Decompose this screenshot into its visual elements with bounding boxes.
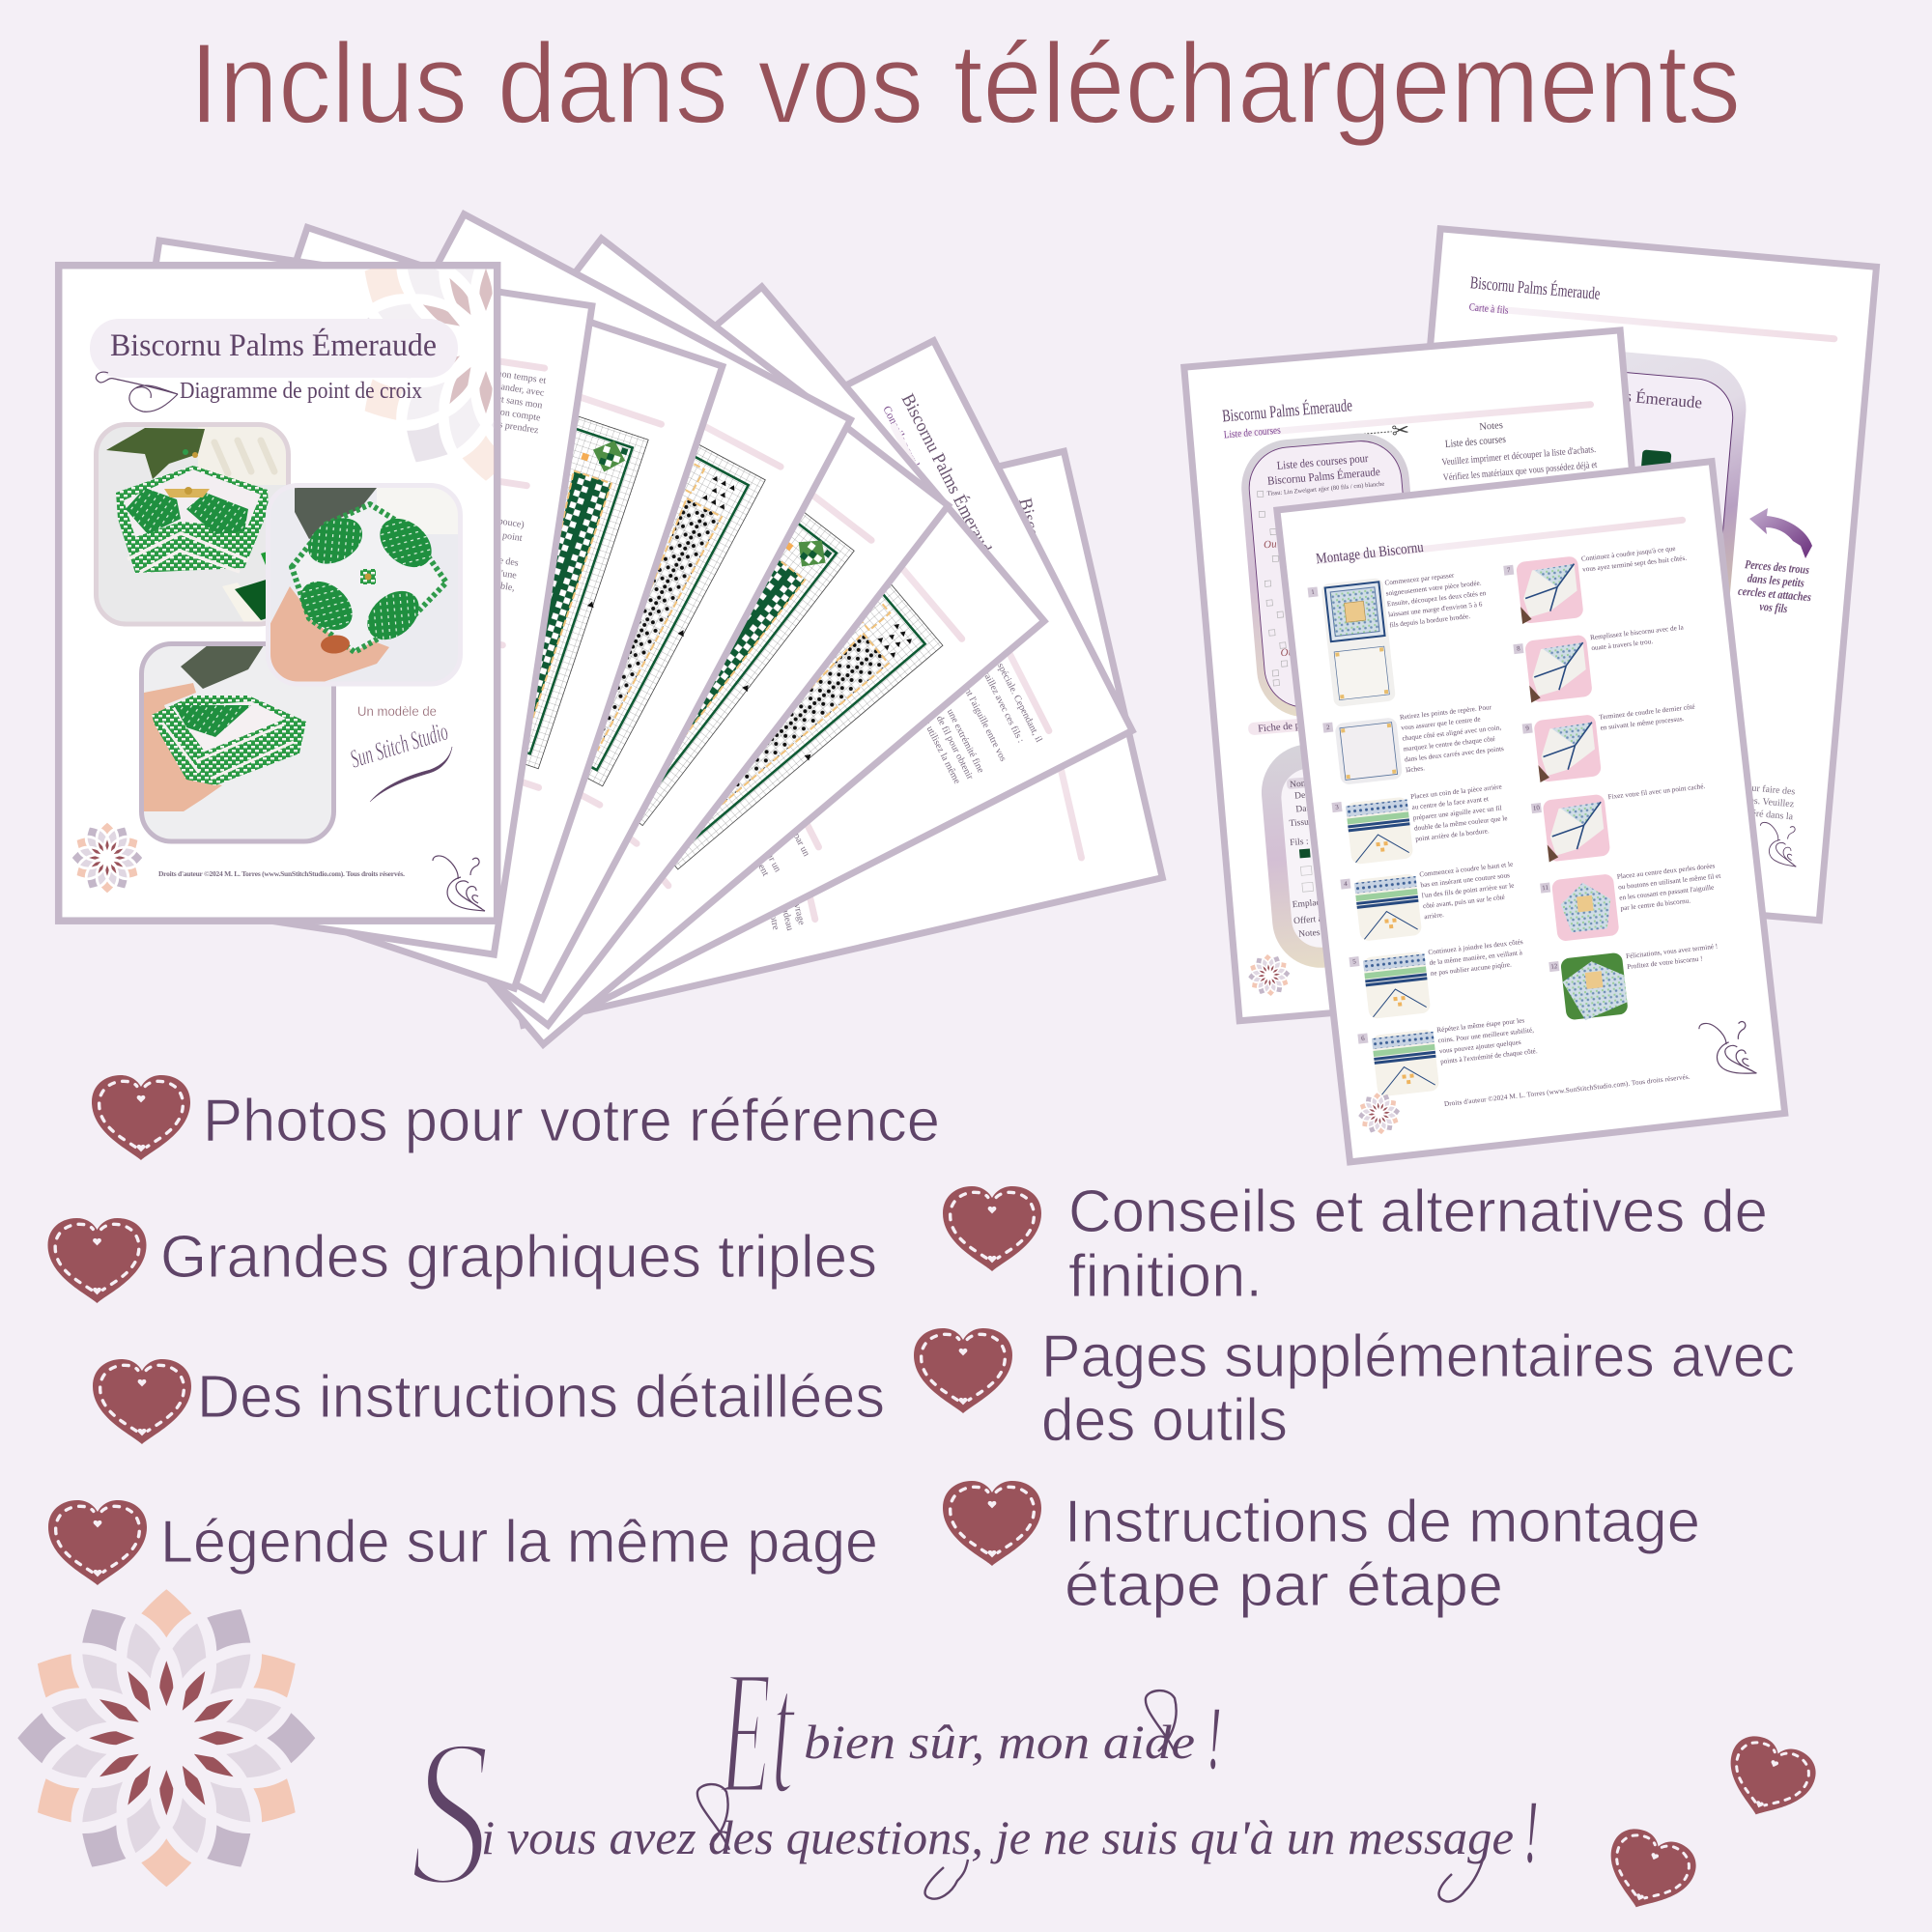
notes column: Veuillez imprimer et découper la liste d'achats.: [1441, 444, 1596, 468]
page: thread tips: créez, une extrémité fine: [933, 685, 986, 776]
icon: heart, upper right: [1716, 1729, 1822, 1830]
feature text: Conseils et alternatives de: [1068, 1179, 1768, 1245]
callout: pierce holes note: cercles et attaches: [1738, 584, 1812, 604]
feature text: Des instructions détaillées: [197, 1364, 885, 1431]
cross stitch sheet card: Designer: [1294, 789, 1329, 802]
step 2: vous assurer que le centre de: [1401, 715, 1481, 732]
step 4: l'un des fils de point arrière sur le: [1421, 882, 1515, 899]
step 3: [1331, 782, 1511, 867]
watermark mandala: [365, 269, 495, 481]
footer copyright: Droits d'auteur ©2024 M. L. Torres (www.SunStitchStudio.com). Tous droits réservés.: [1444, 1073, 1690, 1108]
step 5: ne pas oublier aucune piqûre.: [1430, 960, 1512, 978]
step 9: [1521, 703, 1701, 783]
step 10: 10: [1533, 804, 1541, 812]
page: chart 2: [156, 214, 850, 999]
step 6: points à l'extrémité de chaque côté.: [1440, 1047, 1538, 1065]
step 9: 9: [1525, 724, 1530, 732]
script message line 1: Et: [720, 1634, 796, 1832]
callout: pierce holes note: Perces des trous: [1745, 557, 1810, 577]
step 12: Profitez de votre biscornu !: [1627, 954, 1703, 971]
step 12: [1548, 942, 1724, 1024]
step 3: double de la même couleur que le: [1414, 814, 1508, 833]
step 3: préparez une aiguille avec un fil: [1412, 805, 1502, 822]
step 1: fils depuis la bordure brodée.: [1389, 612, 1471, 629]
step 9: Terminez de coudre le dernier côté: [1599, 703, 1695, 722]
panel: cover page: [55, 262, 500, 924]
page: introduction text: d'une: [496, 568, 518, 582]
step 4: 4: [1344, 880, 1349, 888]
subheading: Carte à fils: [1468, 301, 1509, 317]
step 8: ouate à travers le trou.: [1591, 638, 1654, 652]
feature text: finition.: [1068, 1243, 1263, 1310]
cross stitch sheet card: Offert à: [1293, 914, 1323, 926]
step 3: Placez un coin de la pièce arrière: [1410, 782, 1502, 801]
step 6: Répétez la même étape pour les: [1436, 1016, 1525, 1034]
step 8: Remplissez le biscornu avec de la: [1590, 623, 1685, 641]
page: introduction text: contact sans mon: [475, 390, 543, 412]
step 1: [1307, 566, 1497, 709]
shopping list card: Tissu: Lin Zweigart ajjer (80 fils / cm) blanche: [1266, 481, 1385, 497]
page: thread tips: brin de fil pour obtenir: [925, 698, 976, 781]
title: Inclus dans vos téléchargements: [189, 20, 1741, 148]
step 8: [1513, 623, 1690, 704]
feature text: étape par étape: [1065, 1552, 1503, 1619]
step 4: Commencez à coudre le haut et le: [1419, 861, 1514, 878]
step 10: Fixez votre fil avec un point caché.: [1607, 782, 1706, 801]
icon: heart: [48, 1218, 147, 1303]
page: introduction text: (pouce): [495, 516, 525, 530]
notes column: cochez les cases correspondantes.: [1444, 475, 1599, 498]
cover title pill: [90, 319, 458, 378]
cross stitch sheet card: Date: [1295, 804, 1314, 815]
photo: biscornu top view, left: [94, 422, 291, 626]
cross stitch sheet card: Emplacement: [1292, 896, 1344, 910]
step 1: laissant une marge d'environ 5 à 6: [1388, 600, 1483, 618]
shopping list card: Ou: [1264, 538, 1278, 551]
page: rotated text page, far right: Biscornu Palms Émeraude: [1014, 497, 1076, 680]
corner swirl: [1757, 822, 1800, 867]
page: chart 4: [261, 287, 1044, 1044]
icon: heart: [943, 1481, 1041, 1566]
step 11: [1540, 862, 1726, 943]
step 9: en suivant le même processus.: [1600, 715, 1685, 732]
step 11: 11: [1542, 884, 1549, 892]
heading: Biscornu Palms Émeraude: [1469, 271, 1601, 303]
feature text: des outils: [1041, 1387, 1288, 1454]
step 4: [1340, 861, 1520, 943]
panel: thread card page, back: espéré dans la: [1739, 808, 1794, 822]
step 6: coins. Pour une meilleure stabilité,: [1437, 1026, 1534, 1044]
step 1: Commencez par repasser: [1384, 572, 1455, 587]
corner swirl: [433, 856, 485, 911]
arrow: pointing to card: [1749, 508, 1812, 558]
callout: pierce holes note: vos fils: [1759, 600, 1788, 615]
photo: biscornu in hand, bottom: [139, 641, 336, 843]
heading: Biscornu Palms Émeraude: [1221, 394, 1353, 426]
notes column: Notes: [1479, 420, 1503, 433]
page: introduction text: [61, 241, 592, 954]
feature text: [1065, 1489, 1700, 1619]
feature list: left column: [48, 1075, 940, 1585]
page: introduction text: attention compte: [475, 404, 542, 424]
page: thread tips: ment: [753, 856, 771, 878]
page: thread tips: lorsque vous travaillez avec ces fils :: [952, 613, 1026, 745]
icon: heart, lower right: [1596, 1822, 1702, 1922]
shopping list card: [1237, 430, 1429, 721]
signature logo: [347, 717, 452, 802]
flourish ornament: [96, 372, 178, 412]
panel: thread card page, back: [1383, 229, 1876, 921]
callout: pierce holes note: [1736, 557, 1814, 617]
cross stitch sheet card: Nom: [1290, 779, 1309, 790]
feature text: Photos pour votre référence: [203, 1088, 940, 1154]
step 11: Placez au centre deux perles dorées: [1616, 862, 1716, 881]
cover title pill: Biscornu Palms Émeraude: [110, 327, 437, 363]
copyright line: Droits d'auteur ©2024 M. L. Torres (www.SunStitchStudio.com). Tous droits réservés.: [158, 869, 405, 878]
text: !: [1208, 1689, 1221, 1787]
page: thread tips: vous pouvez utilisez la même: [901, 679, 962, 786]
step 6: 6: [1361, 1035, 1366, 1042]
page: thread tips: en faisant glisser dant l'aiguille entre vos: [927, 618, 1009, 763]
text: !: [1524, 1782, 1538, 1881]
step 7: 7: [1507, 566, 1511, 574]
script message line 2: S: [410, 1694, 491, 1930]
step 2: 2: [1326, 724, 1330, 731]
page: introduction text: de des: [494, 554, 520, 569]
small mandala logo: [1246, 952, 1292, 998]
feature text: [1068, 1179, 1768, 1310]
script message line 1: [720, 1634, 1221, 1832]
shopping list card: Ou: [1280, 646, 1294, 659]
step 3: point arrière de la bordure.: [1415, 827, 1490, 843]
shopping list card: Biscornu Palms Émeraude: [1266, 465, 1380, 488]
page: rotated text page, far right: [425, 451, 1162, 1025]
page: thread tips: aucune technique spéciale. Cependant, il: [963, 599, 1044, 744]
script message line 2: [410, 1694, 1538, 1930]
feature list: right column: [914, 1179, 1795, 1619]
scissors cut line: [1363, 418, 1410, 446]
step 4: bas en insérant une couture sous: [1420, 871, 1510, 889]
page: introduction text: possible,: [480, 578, 516, 593]
icon: heart: [93, 1359, 191, 1444]
step 6: [1357, 1014, 1541, 1098]
notes column: Liste des courses: [1445, 434, 1506, 450]
script message line 1: bien sûr, mon aide: [804, 1715, 1195, 1769]
step 2: dans les deux carrés avec des points: [1405, 745, 1504, 763]
page: introduction text: demander, avec: [484, 380, 546, 399]
step 10: [1531, 782, 1712, 864]
step 8: 8: [1517, 644, 1521, 653]
cross stitch sheet card: Fils :: [1290, 838, 1309, 848]
corner swirl: [1698, 1018, 1756, 1079]
page: rotated text page, far right: votre: [766, 909, 781, 931]
step 7: Continuez à coudre jusqu'à ce que: [1581, 545, 1676, 563]
step 12: 12: [1550, 962, 1558, 971]
step 4: côté avant, puis un sur le côté: [1423, 894, 1505, 910]
thread card: Biscornu Palms Émeraude: [1527, 379, 1703, 412]
subheading: Liste de courses: [1223, 425, 1281, 440]
page: introduction text: que vous prendrez: [468, 414, 540, 436]
page: rotated text page, far right: cadeau: [779, 903, 795, 931]
step 2: marquez le centre de chaque côté: [1403, 735, 1495, 753]
notes column: Vérifiez les matériaux que vous possédez déjà et: [1442, 460, 1598, 483]
feature text: [1041, 1323, 1795, 1454]
step 3: 3: [1335, 803, 1340, 811]
panel: thread card page, back: cercles. Veuillez: [1731, 794, 1795, 810]
step 5: de la même manière, en veillant à: [1429, 949, 1523, 967]
page: chart 3: [201, 239, 949, 1025]
step 1: 1: [1311, 588, 1316, 596]
feature text: Pages supplémentaires avec: [1041, 1323, 1795, 1390]
callout: pierce holes note: dans les petits: [1747, 571, 1804, 590]
page: thread tips: par un: [762, 847, 782, 874]
step 12: Félicitations, vous avez terminé !: [1626, 943, 1719, 960]
cross stitch sheet card: [1258, 732, 1469, 972]
page: thread tips: Conseils pour les fils métallisés: [880, 405, 954, 535]
icon: heart: [943, 1186, 1041, 1271]
step 7: vous ayez terminé sept des huit côtés.: [1582, 554, 1688, 574]
cross stitch sheet card: Notes: [1298, 928, 1321, 940]
step 4: arrière.: [1424, 911, 1444, 921]
page: thread tips: [349, 341, 1132, 1029]
cover subtitle: Diagramme de point de croix: [180, 379, 422, 404]
step 7: [1503, 544, 1692, 625]
panel: thread card page, back: trous pour faire des: [1720, 781, 1796, 797]
small mandala logo: [1356, 1091, 1402, 1137]
step 1: Ensuite, découpez les deux côtés en: [1386, 589, 1487, 608]
panel: assembly instructions page, front: [1277, 462, 1785, 1162]
step 5: [1349, 938, 1530, 1021]
page: thread tips: par un: [791, 832, 811, 858]
panel: fan of pattern pages: [61, 214, 1162, 1044]
step 5: 5: [1352, 957, 1357, 966]
step 6: vous pouvez ajouter quelques: [1438, 1038, 1521, 1055]
cross stitch sheet card: Tissu: [1289, 817, 1310, 829]
signature label: Un modèle de: [357, 703, 437, 719]
step 2: chaque côté est aligné avec un coin,: [1402, 724, 1502, 743]
step 1: soigneusement votre pièce brodée.: [1385, 579, 1482, 598]
heading: [1315, 510, 1687, 567]
feature text: Instructions de montage: [1065, 1489, 1700, 1555]
icon: heart: [48, 1500, 147, 1585]
step 2: [1322, 702, 1506, 786]
step 11: ou boutons en utilisant le même fil et: [1618, 872, 1721, 892]
feature text: Légende sur la même page: [160, 1509, 878, 1576]
cross stitch sheet label: Fiche de point de croix: [1258, 716, 1352, 735]
panel: shopping list page, middle: [1184, 330, 1676, 1021]
page: chart 1: [99, 227, 723, 988]
signature logo: Sun Stitch Studio: [347, 717, 451, 774]
step 5: Continuez à joindre les deux côtés: [1428, 938, 1523, 956]
icon: heart: [92, 1075, 190, 1160]
small mandala logo: [72, 823, 142, 893]
step 3: au centre de la face avant et: [1411, 795, 1489, 811]
feature text: Grandes graphiques triples: [160, 1224, 877, 1291]
step 2: Retirez les points de repère. Pour: [1400, 703, 1492, 722]
page: introduction text: le point: [493, 529, 524, 544]
step 2: lâches.: [1406, 764, 1425, 774]
page: introduction text: de mon temps et: [482, 366, 547, 386]
photo: biscornu back view, right: [266, 483, 462, 686]
scissors cut line: ✂: [1391, 418, 1410, 444]
script message line 2: i vous avez des questions, je ne suis qu'à un message: [481, 1810, 1514, 1864]
page: thread tips: Biscornu Palms Émeraude: [897, 390, 1000, 563]
large mandala: [17, 1589, 315, 1887]
step 11: en les cousant en passant l'aiguille: [1619, 884, 1715, 902]
shopping list card: Liste des courses pour: [1276, 451, 1369, 472]
icon: heart: [914, 1328, 1012, 1413]
heading: Montage du Biscornu: [1315, 539, 1425, 567]
notes column: [1438, 412, 1599, 498]
thread card: [1502, 344, 1750, 709]
page: rotated text page, far right: l'ouvrage: [788, 889, 807, 926]
step 11: par le centre du biscornu.: [1620, 896, 1691, 912]
